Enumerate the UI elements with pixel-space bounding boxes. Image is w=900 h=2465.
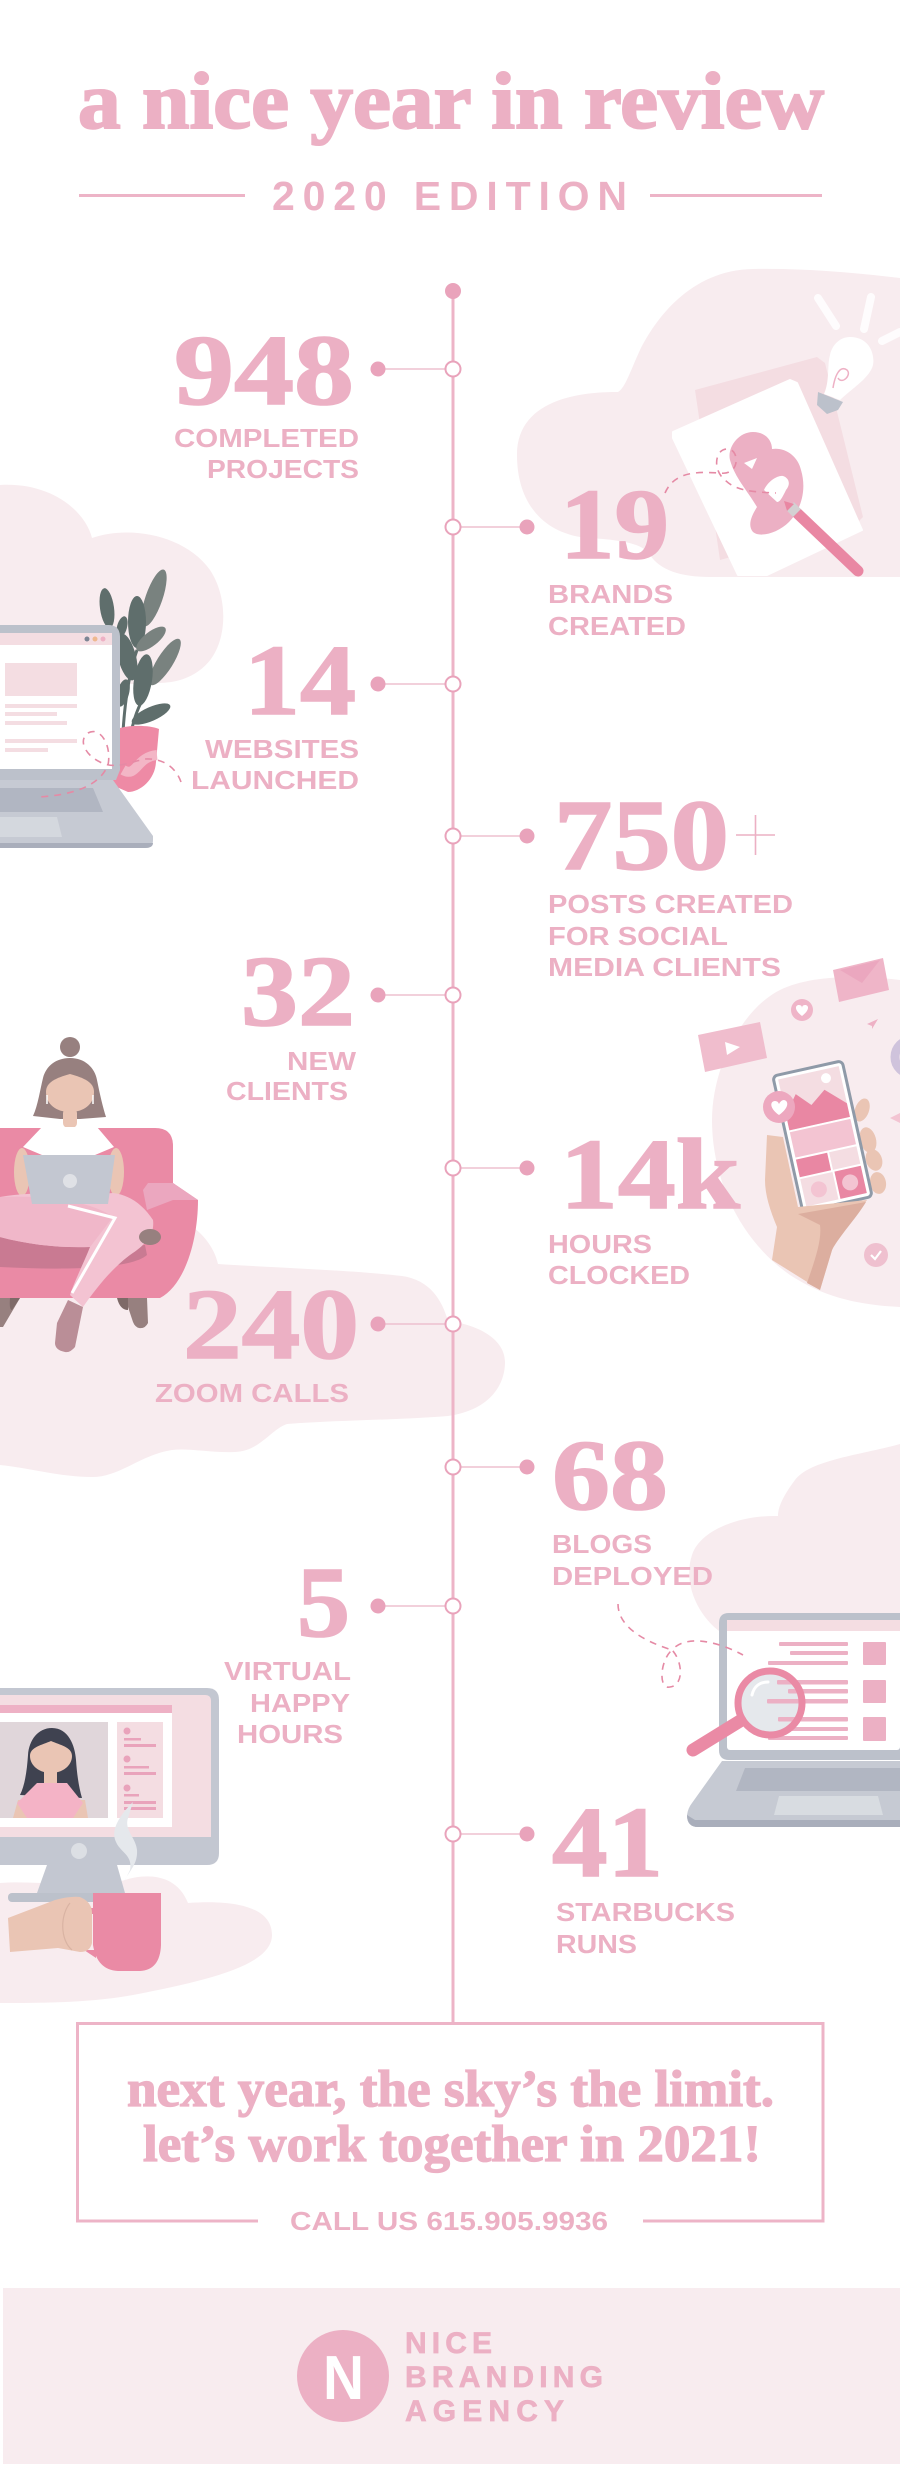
stat: blogs deployed: BLOGS — [552, 1529, 652, 1559]
illustration: website laptop and plant — [0, 485, 223, 848]
stat: zoom calls: ZOOM CALLS — [155, 1378, 349, 1408]
subtitle — [79, 173, 822, 219]
page text lines — [767, 1642, 886, 1741]
background cloud — [0, 1876, 272, 2003]
subtitle: 2020 EDITION — [272, 173, 627, 219]
stat: blogs deployed: DEPLOYED — [552, 1561, 713, 1591]
woman on screen — [13, 1728, 88, 1818]
background cloud — [0, 1225, 505, 1477]
stat: websites launched: 14 — [244, 624, 356, 736]
stat: brands created: 19 — [560, 468, 669, 580]
sofa — [0, 1128, 198, 1328]
hand — [8, 1897, 92, 1952]
logo wordmark: NICE — [405, 2327, 492, 2360]
envelope icon — [833, 958, 889, 1002]
stat: hours clocked: CLOCKED — [548, 1260, 690, 1290]
logo mark — [297, 2330, 389, 2422]
mug — [84, 1893, 161, 1971]
stat: virtual happy hours: HAPPY — [250, 1688, 350, 1718]
stat: zoom calls: 240 — [183, 1268, 359, 1380]
logo wordmark: BRANDING — [405, 2361, 603, 2394]
stat: new clients: 32 — [241, 935, 355, 1047]
logo wordmark — [405, 2327, 603, 2428]
laptop — [687, 1613, 900, 1827]
phone number: CALL US 615.905.9936 — [290, 2206, 608, 2236]
stat: starbucks runs: STARBUCKS — [556, 1897, 735, 1927]
stat: blogs deployed: 68 — [552, 1419, 668, 1531]
heart badge on phone — [763, 1091, 795, 1123]
monitor — [0, 1688, 219, 1902]
stat: websites launched — [191, 624, 359, 795]
stat: completed projects: 948 — [174, 314, 354, 426]
stat: social posts: MEDIA CLIENTS — [548, 952, 781, 982]
stat: brands created — [548, 468, 686, 641]
logo mark: N — [323, 2344, 364, 2413]
small pink marker — [890, 1113, 900, 1123]
dashed path — [38, 732, 181, 797]
stat: completed projects — [174, 314, 359, 484]
heart badge — [791, 999, 813, 1021]
stat: zoom calls — [155, 1268, 359, 1408]
woman — [0, 1037, 161, 1352]
stat: starbucks runs: 41 — [552, 1786, 663, 1898]
laptop — [0, 625, 153, 848]
dashed path — [665, 449, 776, 493]
stat: new clients: CLIENTS — [226, 1076, 348, 1106]
light bulb — [817, 297, 900, 414]
stat: brands created: CREATED — [548, 611, 686, 641]
call to action heading: next year, the sky’s the limit. — [127, 2061, 774, 2118]
hand — [765, 1135, 867, 1290]
phone — [771, 1059, 874, 1214]
timeline — [370, 283, 534, 2024]
back paper — [695, 357, 863, 560]
stat: hours clocked — [548, 1118, 741, 1290]
stat: starbucks runs — [552, 1786, 735, 1959]
stat: completed projects: COMPLETED — [174, 423, 359, 453]
letter B — [730, 432, 803, 535]
stat: websites launched: WEBSITES — [205, 734, 359, 764]
background cloud — [689, 1444, 900, 1640]
stat: virtual happy hours — [224, 1546, 351, 1749]
call to action heading — [127, 2061, 774, 2173]
stat: hours clocked: HOURS — [548, 1229, 652, 1259]
plant pot — [112, 726, 159, 792]
call to action heading: let’s work together in 2021! — [143, 2116, 761, 2173]
stat: virtual happy hours: 5 — [297, 1546, 350, 1658]
plant — [97, 567, 186, 732]
profile ring — [895, 1040, 900, 1074]
stat: new clients: NEW — [287, 1046, 357, 1076]
stat: new clients — [226, 935, 357, 1106]
laptop — [23, 1155, 115, 1204]
illustration: brand design — [517, 269, 900, 577]
illustration: social media phone — [698, 958, 900, 1307]
stat: social posts: FOR SOCIAL — [548, 921, 728, 951]
dashed path — [618, 1604, 743, 1687]
steam — [114, 1802, 137, 1882]
pencil — [784, 501, 858, 571]
magnifier lens — [738, 1671, 802, 1735]
stat: virtual happy hours: VIRTUAL — [224, 1656, 351, 1686]
hand fingers — [851, 1096, 888, 1195]
background cloud — [0, 485, 223, 700]
background blob — [712, 977, 900, 1307]
stat: social posts — [548, 779, 793, 982]
check badge — [864, 1243, 888, 1267]
magnifier — [693, 1671, 802, 1750]
stat: blogs deployed — [552, 1419, 713, 1591]
footer band — [3, 2288, 900, 2464]
illustration: blog laptop with magnifier — [618, 1444, 900, 1827]
stat: completed projects: PROJECTS — [207, 454, 359, 484]
white sheet — [673, 380, 862, 575]
stat: virtual happy hours: HOURS — [237, 1719, 343, 1749]
video icon — [698, 1022, 767, 1072]
stat: social posts: POSTS CREATED — [548, 889, 793, 919]
logo wordmark: AGENCY — [405, 2395, 564, 2428]
stat: social posts: 750 — [554, 779, 729, 891]
stat: starbucks runs: RUNS — [556, 1929, 637, 1959]
chat list — [124, 1728, 156, 1810]
stat: brands created: BRANDS — [548, 579, 673, 609]
illustration: video call monitor with mug — [0, 1688, 272, 2003]
call to action box — [78, 2024, 823, 2236]
stat: websites launched: LAUNCHED — [191, 765, 359, 795]
background cloud — [517, 269, 900, 577]
illustration: woman on sofa with cloud — [0, 1037, 505, 1477]
stat: hours clocked: 14k — [560, 1118, 741, 1230]
title: a nice year in review — [78, 56, 825, 146]
paper plane — [867, 1019, 878, 1029]
